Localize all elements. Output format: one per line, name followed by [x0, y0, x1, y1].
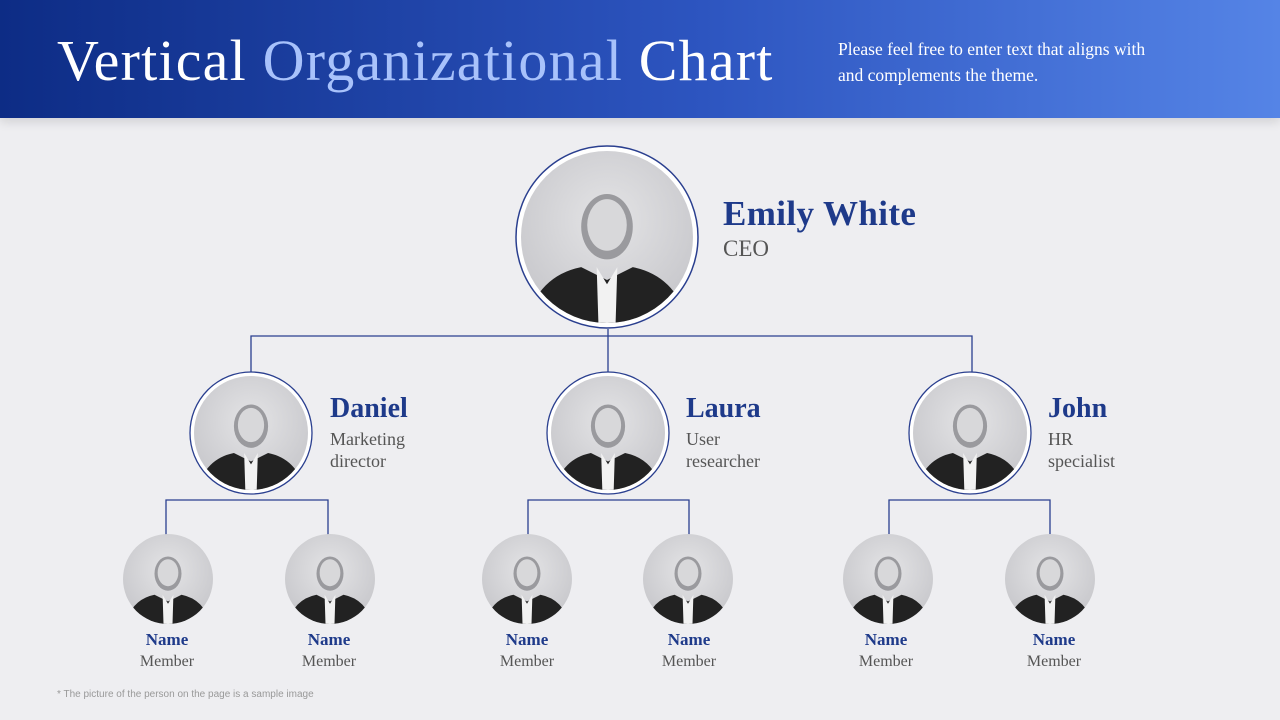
subtitle: and complements the theme.	[838, 65, 1038, 85]
manager label: Daniel: Marketing	[330, 429, 405, 449]
member labels	[140, 630, 1081, 670]
member photos	[123, 534, 1095, 624]
manager label: Daniel: director	[330, 451, 386, 471]
manager label: Daniel	[330, 393, 408, 471]
manager label: Laura: researcher	[686, 451, 760, 471]
CEO label: CEO	[723, 236, 769, 261]
member labels: Name	[865, 630, 907, 649]
member labels: Member	[500, 653, 554, 670]
manager label: Laura: User	[686, 429, 720, 449]
manager label: John	[1048, 393, 1115, 471]
manager label: John: HR	[1048, 429, 1073, 449]
manager label: Daniel: Daniel	[330, 393, 408, 424]
manager label: John: specialist	[1048, 451, 1115, 471]
member labels: Name	[1033, 630, 1075, 649]
CEO photo	[516, 146, 698, 328]
member labels: Member	[662, 653, 716, 670]
CEO label	[723, 194, 916, 261]
org chart graphic	[123, 145, 1095, 624]
subtitle	[838, 39, 1145, 85]
manager photos	[190, 372, 1031, 494]
member labels: Member	[140, 653, 194, 670]
subtitle: Please feel free to enter text that aligns with	[838, 39, 1145, 59]
member labels: Name	[668, 630, 710, 649]
member labels: Member	[302, 653, 356, 670]
manager label: Laura	[686, 393, 761, 471]
manager label: Laura: Laura	[686, 393, 761, 424]
footnote: * The picture of the person on the page is a sample image	[57, 689, 314, 700]
CEO label: Emily White	[723, 194, 916, 233]
member labels: Member	[1027, 653, 1081, 670]
manager label: John: John	[1048, 393, 1107, 424]
header bar	[0, 0, 1280, 118]
title: Vertical Organizational Chart	[57, 28, 774, 93]
member labels: Member	[859, 653, 913, 670]
member labels: Name	[308, 630, 350, 649]
member labels: Name	[506, 630, 548, 649]
member labels: Name	[146, 630, 188, 649]
